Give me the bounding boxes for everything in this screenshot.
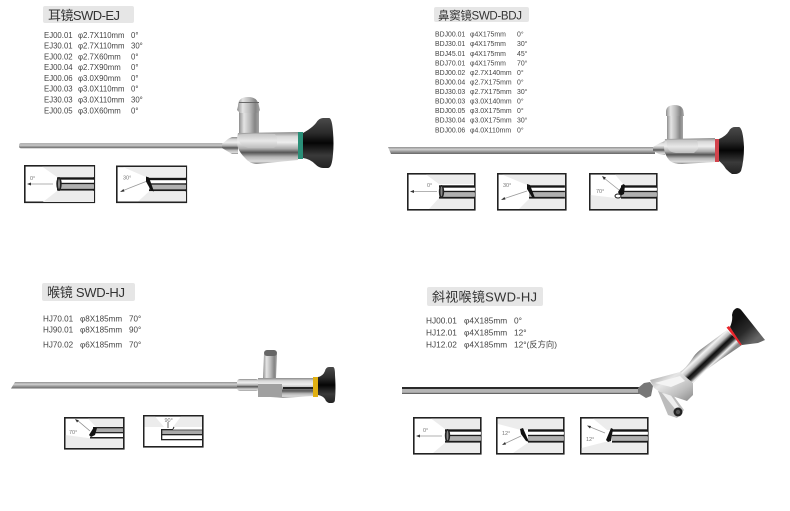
spec list: oblique laryngoscope models: 12° (514, 328, 527, 338)
spec list: sinus scope models: BDJ00.03 (435, 98, 465, 106)
spec list: sinus scope models: 0° (517, 78, 524, 86)
spec list: otoscope models: φ3.0X60mm (78, 106, 121, 116)
spec list: oblique laryngoscope models: φ4X185mm (464, 340, 507, 350)
panel: sinus scope SWD-BDJ (388, 7, 744, 210)
diagram: 0 degree view: 0° (30, 176, 35, 182)
heading badge: oblique laryngoscope: 斜视喉镜SWD-HJ (432, 290, 537, 304)
spec list: otoscope models: φ3.0X90mm (78, 74, 121, 83)
spec list: oblique laryngoscope models: HJ12.02 (426, 340, 457, 350)
diagram: 90 degree view (144, 416, 203, 447)
diagram: 30 degree view (117, 166, 186, 202)
heading badge: sinus scope (434, 7, 529, 22)
endoscope: otoscope with green band (19, 97, 334, 168)
spec list: sinus scope models: 0° (517, 30, 524, 38)
spec list: laryngoscope models: φ8X185mm (80, 326, 122, 334)
spec list: otoscope models: 0° (131, 74, 138, 83)
diagram: 0 degree view: 0° (423, 428, 428, 434)
spec list: otoscope models: 0° (131, 84, 138, 94)
spec list: sinus scope models: 0° (517, 126, 524, 134)
spec list: sinus scope models: φ4X175mm (470, 41, 506, 48)
spec list: sinus scope models: φ3.0X140mm (470, 98, 512, 106)
spec list: otoscope models: φ3.0X110mm (78, 96, 125, 104)
spec list: otoscope models: 0° (131, 106, 138, 116)
spec list: laryngoscope models: 90° (129, 326, 141, 334)
spec list: otoscope models: φ2.7X90mm (78, 63, 121, 72)
spec list: sinus scope models: φ4X175mm (470, 51, 506, 58)
diagram: 30 degree view (498, 174, 566, 210)
spec list: otoscope models: 0° (131, 52, 138, 62)
spec list: sinus scope models: 45° (517, 50, 528, 58)
heading badge: otoscope (43, 6, 134, 23)
spec list: sinus scope models: 0° (517, 69, 524, 77)
diagram: 0 degree view (408, 174, 475, 210)
spec list: otoscope models: EJ00.02 (44, 52, 73, 62)
spec list: sinus scope models: φ2.7X140mm (470, 70, 512, 77)
heading badge: laryngoscope: 喉镜 SWD-HJ (47, 285, 125, 300)
spec list: otoscope models: φ3.0X110mm (78, 84, 125, 94)
spec list: sinus scope models: BDJ00.05 (435, 108, 465, 115)
spec list: oblique laryngoscope models (426, 316, 557, 350)
endoscope: oblique laryngoscope with red band (402, 308, 765, 418)
spec list: otoscope models: EJ30.01 (44, 42, 73, 50)
diagram: 70 degree view (590, 174, 657, 210)
diagram: 12 degree reversed view (581, 418, 648, 454)
spec list: sinus scope models: BDJ00.06 (435, 128, 465, 134)
spec list: oblique laryngoscope models: φ4X185mm (464, 328, 507, 338)
spec list: sinus scope models: 70° (517, 60, 528, 68)
spec list: otoscope models: 0° (131, 31, 138, 40)
spec list: sinus scope models: φ3.0X175mm (470, 118, 512, 124)
spec list: sinus scope models: BDJ30.01 (435, 41, 465, 48)
spec list: sinus scope models: 30° (517, 40, 528, 48)
spec list: laryngoscope models (43, 314, 141, 350)
spec list: sinus scope models: BDJ30.03 (435, 89, 465, 96)
spec list: sinus scope models: BDJ70.01 (435, 60, 465, 68)
panel: otoscope SWD-EJ (19, 6, 334, 202)
spec list: sinus scope models: φ3.0X175mm (470, 108, 512, 115)
spec list: oblique laryngoscope models: HJ00.01 (426, 316, 457, 326)
spec list: sinus scope models: φ2.7X175mm (470, 80, 512, 86)
diagram: 90 degree view: 90° (164, 418, 173, 424)
spec list: laryngoscope models: 70° (129, 314, 141, 324)
spec list: sinus scope models (435, 30, 528, 134)
spec list: otoscope models: 30° (131, 96, 143, 104)
spec list: otoscope models: φ2.7X110mm (78, 31, 125, 40)
diagram: 0 degree view (414, 418, 481, 454)
spec list: sinus scope models: 30° (517, 116, 528, 124)
spec list: laryngoscope models: HJ90.01 (43, 326, 74, 334)
diagram: 30 degree view: 30° (503, 183, 511, 189)
diagram: 30 degree view: 30° (123, 176, 131, 182)
endoscope: laryngoscope with yellow band (11, 350, 336, 403)
diagram: 12 degree view: 12° (502, 431, 510, 437)
spec list: sinus scope models: φ4X175mm (470, 32, 506, 38)
spec list: otoscope models: EJ00.03 (44, 84, 73, 94)
spec list: oblique laryngoscope models: 12°(反方向) (514, 340, 557, 350)
spec list: sinus scope models: BDJ45.01 (435, 51, 465, 58)
spec list: otoscope models: 30° (131, 42, 143, 50)
spec list: oblique laryngoscope models: 0° (514, 316, 522, 326)
spec list: sinus scope models: φ4X175mm (470, 60, 506, 68)
spec list: otoscope models: EJ30.03 (44, 96, 73, 104)
spec list: sinus scope models: 0° (517, 107, 524, 115)
spec list: otoscope models: φ2.7X110mm (78, 42, 125, 50)
heading badge: otoscope: 耳镜SWD-EJ (48, 8, 120, 23)
spec list: otoscope models: EJ00.06 (44, 74, 73, 83)
spec list: otoscope models: EJ00.01 (44, 31, 73, 40)
heading badge: laryngoscope (42, 283, 135, 301)
spec list: otoscope models: 0° (131, 63, 138, 72)
spec list: sinus scope models: BDJ30.04 (435, 118, 465, 124)
panel: oblique laryngoscope SWD-HJ (402, 287, 765, 454)
spec list: oblique laryngoscope models: HJ12.01 (426, 328, 457, 338)
spec list: oblique laryngoscope models: φ4X185mm (464, 316, 507, 326)
endoscope: sinus scope with red band (388, 105, 744, 174)
diagram: 0 degree view: 0° (427, 183, 432, 189)
spec list: otoscope models: EJ00.04 (44, 63, 73, 72)
spec list: laryngoscope models: φ6X185mm (80, 340, 122, 350)
diagram: 70 degree view: 70° (69, 430, 77, 436)
spec list: laryngoscope models: 70° (129, 340, 141, 350)
spec list: sinus scope models: BDJ00.02 (435, 70, 465, 77)
diagram: 70 degree view: 70° (596, 189, 604, 195)
spec list: laryngoscope models: φ8X185mm (80, 314, 122, 324)
spec list: otoscope models: φ2.7X60mm (78, 52, 121, 62)
spec list: sinus scope models: φ2.7X175mm (470, 89, 512, 96)
spec list: laryngoscope models: HJ70.01 (43, 314, 74, 324)
spec list: sinus scope models: BDJ00.01 (435, 32, 465, 38)
diagram: 12 degree view (497, 418, 564, 454)
spec list: sinus scope models: BDJ00.04 (435, 80, 465, 86)
spec list: sinus scope models: 30° (517, 88, 528, 96)
spec list: laryngoscope models: HJ70.02 (43, 340, 74, 350)
diagram: 70 degree view (65, 418, 124, 449)
spec list: sinus scope models: φ4.0X110mm (470, 128, 511, 134)
spec list: otoscope models (44, 31, 143, 116)
panel: laryngoscope SWD-HJ (11, 283, 336, 449)
diagram: 0 degree view (25, 166, 94, 202)
heading badge: sinus scope: 鼻窦镜SWD-BDJ (438, 8, 522, 22)
diagram: 12 degree reversed view: 12° (586, 437, 594, 443)
spec list: sinus scope models: 0° (517, 98, 524, 106)
spec list: otoscope models: EJ00.05 (44, 106, 73, 116)
